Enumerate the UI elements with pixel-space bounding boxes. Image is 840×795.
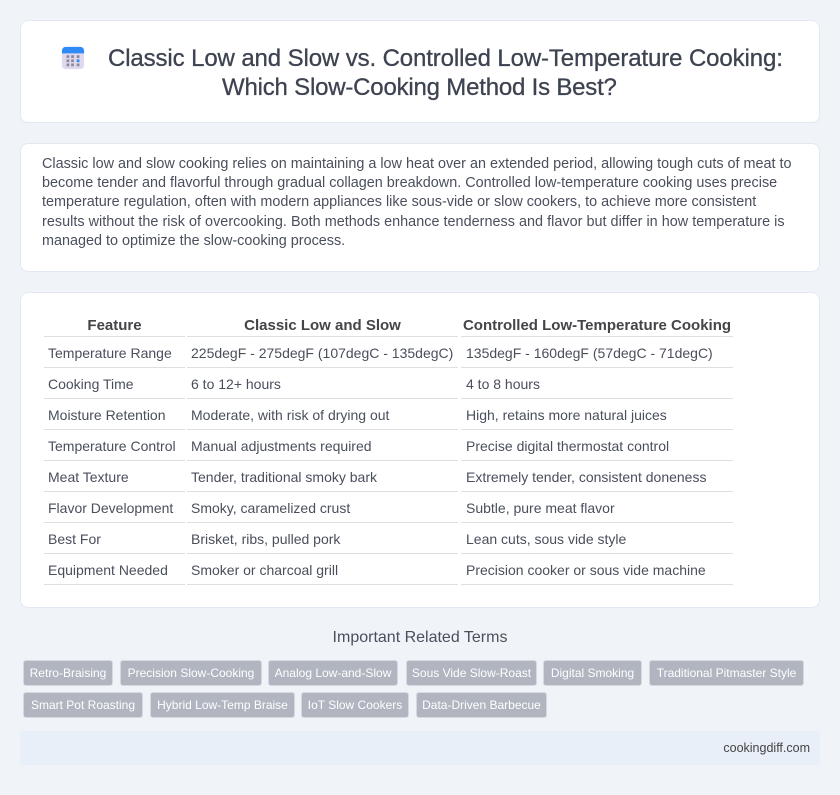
table header: Controlled Low-Temperature Cooking <box>463 317 731 334</box>
row: temperature range: 225degF - 275degF (107degC - 135degC) <box>191 345 453 361</box>
tag: Hybrid Low-Temp Braise <box>157 698 288 712</box>
tag <box>543 660 642 686</box>
row: temperature control: Precise digital thermostat control <box>466 438 669 454</box>
row: moisture retention: Moderate, with risk of drying out <box>191 407 389 423</box>
text block: description: managed to optimize the slow-cooking process. <box>42 233 345 249</box>
text block: description <box>42 156 792 249</box>
tag <box>416 692 547 718</box>
tag: IoT Slow Cookers <box>308 698 402 712</box>
table header: Feature <box>87 317 142 334</box>
row: equipment needed: Precision cooker or sous vide machine <box>466 562 706 578</box>
row: moisture retention: High, retains more natural juices <box>466 407 667 423</box>
tag <box>649 660 804 686</box>
row: temperature control: Temperature Control <box>48 438 176 454</box>
row: moisture retention: Moisture Retention <box>48 407 166 423</box>
tag <box>120 660 262 686</box>
tag: Precision Slow-Cooking <box>128 666 254 680</box>
panel: header <box>20 20 820 123</box>
row: best for <box>44 531 733 554</box>
row: flavor development: Smoky, caramelized crust <box>191 500 350 516</box>
row: moisture retention <box>44 407 733 430</box>
row: meat texture: Extremely tender, consistent doneness <box>466 469 706 485</box>
row: temperature control: Manual adjustments required <box>191 438 372 454</box>
tag: Traditional Pitmaster Style <box>657 666 796 680</box>
row: flavor development: Flavor Development <box>48 500 173 516</box>
row: cooking time: 4 to 8 hours <box>466 376 540 392</box>
text block: description: results without the risk of overcooking. Both methods enhance tenderness and flavor but differ in how temperature is <box>42 214 785 230</box>
row: best for: Brisket, ribs, pulled pork <box>191 531 340 547</box>
tag: Sous Vide Slow-Roast <box>412 666 531 680</box>
row: temperature range: 135degF - 160degF (57degC - 71degC) <box>466 345 713 361</box>
title: Classic Low and Slow vs. Controlled Low-Temperature Cooking: <box>108 45 783 72</box>
panel: comparison table <box>20 292 820 608</box>
row: cooking time: Cooking Time <box>48 376 134 392</box>
row: equipment needed: Equipment Needed <box>48 562 168 578</box>
row: flavor development: Subtle, pure meat flavor <box>466 500 615 516</box>
tag: Data-Driven Barbecue <box>422 698 541 712</box>
row: cooking time: 6 to 12+ hours <box>191 376 281 392</box>
tag <box>23 692 143 718</box>
row: cooking time <box>44 376 733 399</box>
tag <box>268 660 398 686</box>
tag <box>23 660 113 686</box>
row: flavor development <box>44 500 733 523</box>
row: temperature control <box>44 438 733 461</box>
row: meat texture: Meat Texture <box>48 469 129 485</box>
row: temperature range: Temperature Range <box>48 345 172 361</box>
heading: important related terms: Important Related Terms <box>333 629 507 646</box>
text block: description: become tender and flavorful through gradual collagen breakdown. Controlled low-temperature cooking uses precise <box>42 175 777 191</box>
row: best for: Best For <box>48 531 101 547</box>
text block: description: temperature regulation, often with modern appliances like sous-vide or slow cookers, to achieve more consistent <box>42 194 756 210</box>
footer: site name: cookingdiff.com <box>723 741 810 755</box>
tag: Digital Smoking <box>551 666 634 680</box>
row: temperature range <box>44 345 733 368</box>
row: meat texture <box>44 469 733 492</box>
tag: Analog Low-and-Slow <box>275 666 391 680</box>
tags: related terms <box>23 660 804 718</box>
row: equipment needed: Smoker or charcoal grill <box>191 562 338 578</box>
row: meat texture: Tender, traditional smoky bark <box>191 469 377 485</box>
title: Which Slow-Cooking Method Is Best? <box>222 74 617 101</box>
row: equipment needed <box>44 562 733 585</box>
text block: description: Classic low and slow cooking relies on maintaining a low heat over an extended period, allowing tough cuts of meat to <box>42 156 792 172</box>
tag: Smart Pot Roasting <box>31 698 135 712</box>
row: best for: Lean cuts, sous vide style <box>466 531 626 547</box>
icon: calendar <box>62 46 84 70</box>
footer <box>20 731 820 765</box>
panel: description <box>20 143 820 272</box>
title <box>108 45 783 101</box>
table header: Classic Low and Slow <box>244 317 401 334</box>
tag: Retro-Braising <box>30 666 106 680</box>
tag <box>150 692 295 718</box>
tag <box>301 692 409 718</box>
tag <box>406 660 537 686</box>
table header <box>44 317 733 337</box>
